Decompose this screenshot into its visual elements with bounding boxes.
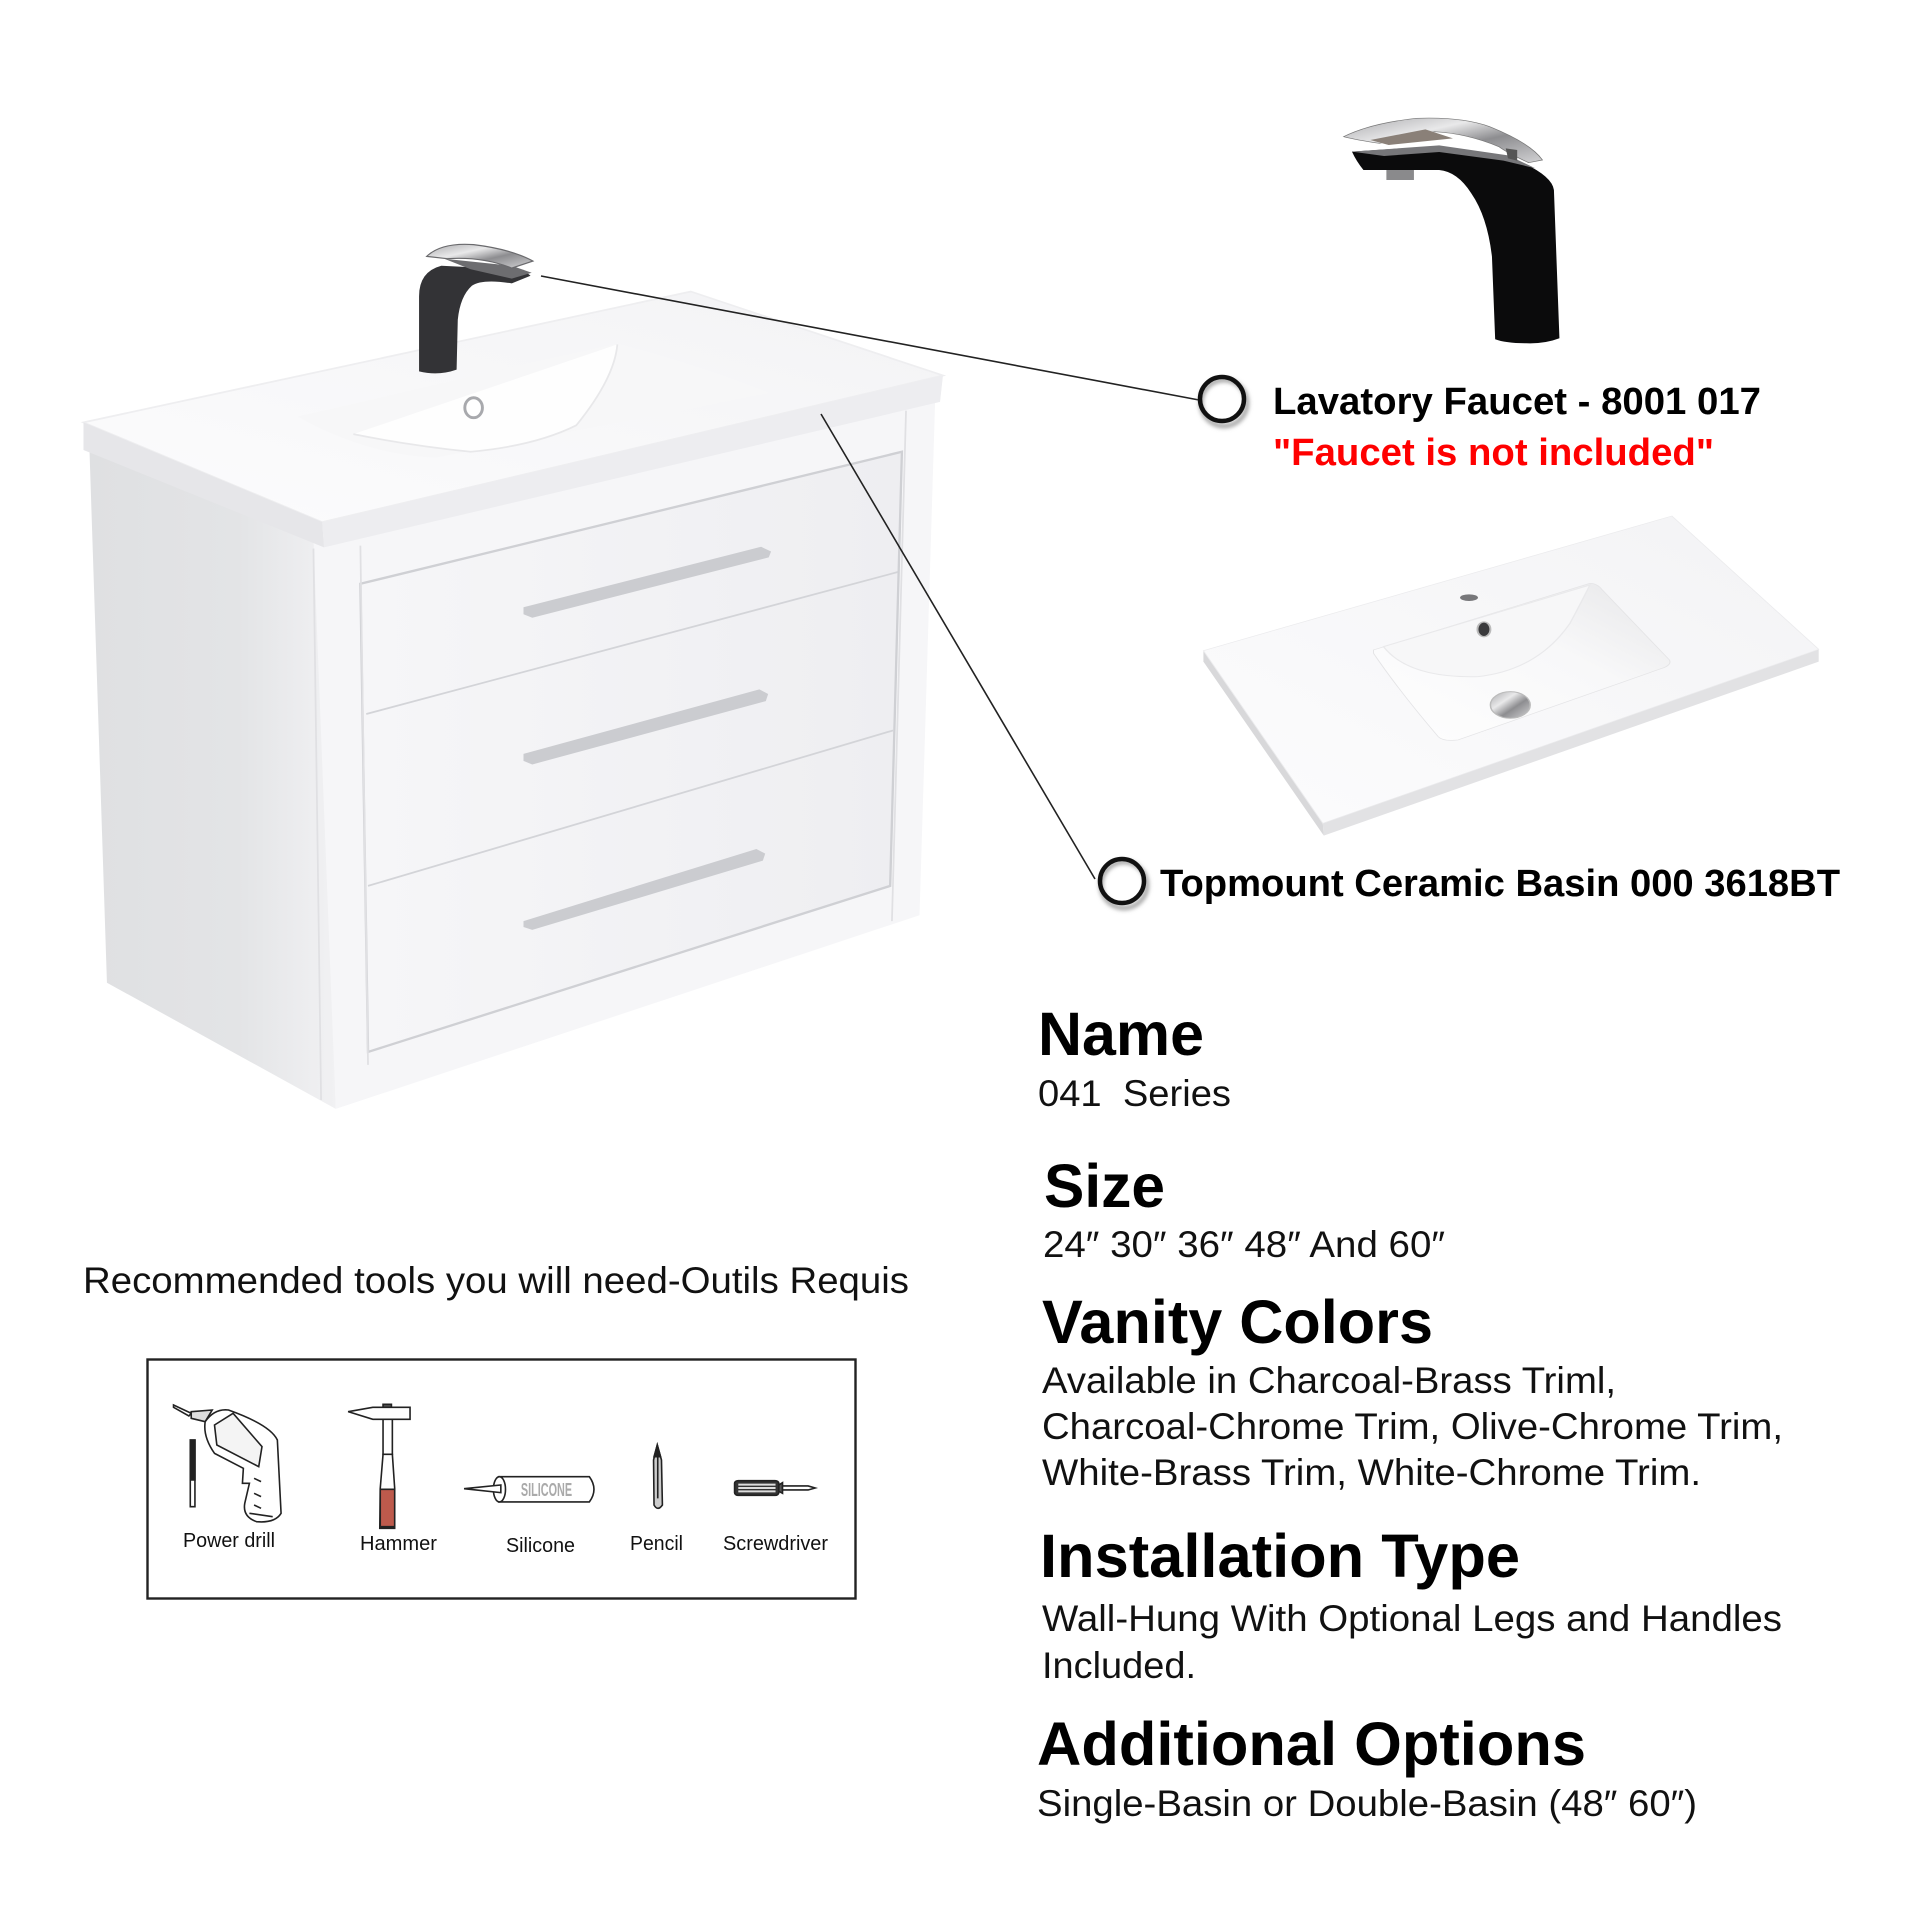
spec: installation type: Wall-Hung With Optional Legs and Handles bbox=[1042, 1598, 1782, 1639]
spec: additional options: Single-Basin or Double-Basin (48″ 60″) bbox=[1037, 1783, 1697, 1824]
drawer handle top bbox=[523, 547, 771, 618]
leader line to faucet bbox=[541, 276, 1199, 400]
icon: hammer bbox=[348, 1404, 410, 1528]
spec: name: 041 Series bbox=[1038, 1073, 1231, 1114]
tap hole bbox=[1460, 594, 1478, 601]
label: screwdriver: Screwdriver bbox=[723, 1533, 828, 1555]
spec: installation type bbox=[1040, 1522, 1782, 1686]
basin callout ring bbox=[1100, 859, 1147, 908]
overflow hole bbox=[465, 398, 482, 418]
basin label: Topmount Ceramic Basin 000 3618BT bbox=[1160, 863, 1840, 905]
faucet callout ring bbox=[1200, 377, 1247, 426]
faucet body bbox=[1352, 146, 1559, 343]
recommended tools heading: Recommended tools you will need-Outils Requis bbox=[83, 1260, 909, 1301]
vanity cabinet illustration bbox=[83, 244, 943, 1109]
faucet not included note: "Faucet is not included" bbox=[1273, 432, 1714, 474]
faucet detail photo bbox=[1344, 118, 1559, 343]
basin left edge bbox=[1203, 651, 1324, 836]
spec: size: 24″ 30″ 36″ 48″ And 60″ bbox=[1043, 1224, 1445, 1265]
icon: silicone tube: SILICONE bbox=[521, 1479, 572, 1500]
spec: vanity colors: Vanity Colors bbox=[1042, 1288, 1433, 1356]
spec: installation type: Included. bbox=[1042, 1645, 1196, 1686]
spec: vanity colors: Available in Charcoal-Brass Triml, bbox=[1042, 1360, 1616, 1401]
faucet chrome handle bbox=[1344, 118, 1542, 163]
basin front edge bbox=[1323, 649, 1819, 836]
cabinet front frame bbox=[313, 393, 935, 1109]
spec: installation type: Installation Type bbox=[1040, 1522, 1520, 1590]
spec: size: Size bbox=[1044, 1152, 1165, 1220]
basin overflow bbox=[1477, 622, 1490, 637]
spec: additional options: Additional Options bbox=[1037, 1710, 1586, 1778]
ceramic basin photo bbox=[1203, 516, 1819, 836]
spec: name bbox=[1038, 1000, 1231, 1114]
basin top surface bbox=[83, 292, 943, 522]
drawer handle middle bbox=[523, 689, 768, 764]
cabinet side panel bbox=[89, 446, 336, 1109]
spec: size bbox=[1043, 1152, 1445, 1265]
tools panel bbox=[148, 1360, 856, 1598]
faucet top lip bbox=[1352, 145, 1536, 168]
sink bowl bbox=[298, 343, 770, 458]
faucet aerator bbox=[1386, 168, 1414, 180]
label: silicone: Silicone bbox=[506, 1535, 575, 1557]
spec: vanity colors: White-Brass Trim, White-Chrome Trim. bbox=[1042, 1452, 1701, 1493]
drawer handle bottom bbox=[523, 849, 765, 930]
label: power drill: Power drill bbox=[183, 1530, 275, 1552]
spec: name: Name bbox=[1038, 1000, 1204, 1068]
spec: additional options bbox=[1037, 1710, 1697, 1824]
installed faucet bbox=[419, 244, 533, 373]
label: hammer: Hammer bbox=[360, 1533, 437, 1555]
icon: pencil bbox=[654, 1445, 662, 1508]
icon: silicone tube bbox=[464, 1477, 594, 1502]
basin left edge bbox=[83, 422, 324, 547]
basin drain bbox=[1490, 692, 1530, 718]
basin top bbox=[1203, 516, 1819, 823]
icon: power drill bbox=[174, 1405, 281, 1522]
spec: vanity colors: Charcoal-Chrome Trim, Olive-Chrome Trim, bbox=[1042, 1406, 1783, 1447]
basin bowl bbox=[1374, 583, 1670, 740]
drawer stack bbox=[313, 411, 906, 1100]
faucet label: Lavatory Faucet - 8001 017 bbox=[1273, 381, 1761, 423]
leader line to basin bbox=[821, 414, 1095, 879]
label: pencil: Pencil bbox=[630, 1533, 683, 1555]
basin front edge bbox=[322, 375, 943, 547]
spec: vanity colors bbox=[1042, 1288, 1783, 1493]
icon: screwdriver bbox=[735, 1481, 815, 1495]
